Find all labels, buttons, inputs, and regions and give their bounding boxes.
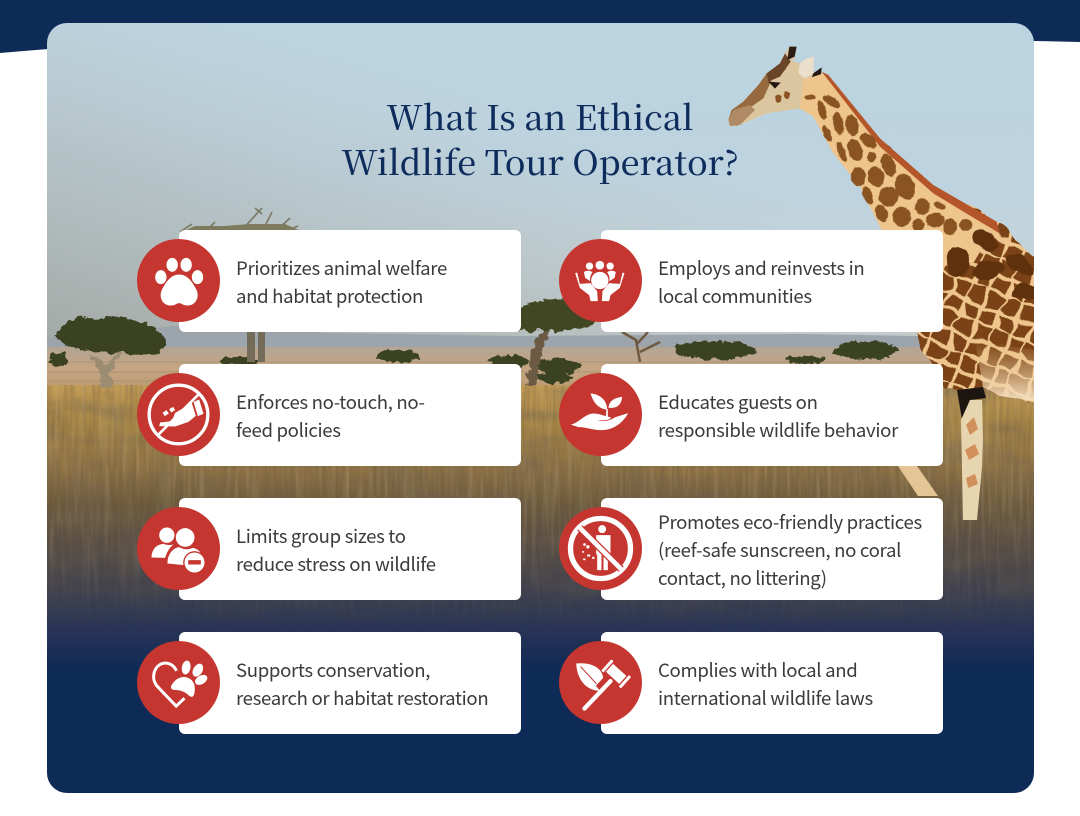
text bbox=[236, 254, 447, 309]
icon: leaf and gavel bbox=[559, 641, 642, 724]
card background bbox=[601, 632, 943, 734]
card background bbox=[179, 498, 521, 600]
text: research or habitat restoration bbox=[236, 684, 488, 711]
text: international wildlife laws bbox=[658, 684, 873, 711]
plain bbox=[47, 347, 932, 385]
text bbox=[658, 656, 873, 711]
distant hills bbox=[47, 326, 920, 347]
mane bbox=[822, 72, 1000, 233]
icon: heart with paw bbox=[137, 641, 220, 724]
belly shade bbox=[975, 340, 1034, 401]
neck spots bbox=[775, 91, 972, 235]
text: Limits group sizes to bbox=[236, 522, 406, 549]
icon: group minus bbox=[137, 507, 220, 590]
text: Complies with local and bbox=[658, 656, 857, 683]
navy wave bbox=[0, 0, 1080, 53]
text: Promotes eco-friendly practices bbox=[658, 508, 922, 535]
icon: no littering bbox=[559, 507, 642, 590]
text: contact, no littering) bbox=[658, 564, 827, 591]
panel: animal welfare bbox=[137, 230, 521, 332]
text: Educates guests on bbox=[658, 388, 818, 415]
card background bbox=[179, 632, 521, 734]
title: Wildlife Tour Operator? bbox=[341, 136, 739, 185]
text bbox=[658, 508, 922, 591]
text: Enforces no-touch, no- bbox=[236, 388, 425, 415]
panel: no touch bbox=[137, 364, 521, 466]
rump dark spots bbox=[947, 226, 1039, 300]
card background bbox=[601, 498, 943, 600]
card background bbox=[601, 364, 943, 466]
bare crown of tree behind first card bbox=[180, 208, 298, 232]
text bbox=[236, 656, 488, 711]
panel: local communities bbox=[559, 230, 943, 332]
text: reduce stress on wildlife bbox=[236, 550, 436, 577]
grass bbox=[47, 385, 1034, 670]
card background bbox=[601, 230, 943, 332]
rear legs bbox=[957, 387, 986, 420]
neck base colour over pattern bbox=[800, 73, 997, 270]
icon: paw bbox=[137, 239, 220, 322]
panel: eco-friendly bbox=[559, 498, 943, 600]
sky bbox=[47, 23, 1034, 343]
panel: group sizes bbox=[137, 498, 521, 600]
text bbox=[236, 522, 436, 577]
panel: conservation bbox=[137, 632, 521, 734]
title bbox=[341, 91, 739, 185]
giraffe bbox=[728, 47, 1044, 520]
text: Prioritizes animal welfare bbox=[236, 254, 447, 281]
text: feed policies bbox=[236, 416, 341, 443]
title: What Is an Ethical bbox=[386, 91, 694, 140]
head bbox=[728, 47, 822, 126]
text: local communities bbox=[658, 282, 812, 309]
panel: education bbox=[559, 364, 943, 466]
card background bbox=[179, 364, 521, 466]
icon: people in hands bbox=[559, 239, 642, 322]
text: responsible wildlife behavior bbox=[658, 416, 898, 443]
panel: laws bbox=[559, 632, 943, 734]
text bbox=[658, 388, 898, 443]
text: (reef-safe sunscreen, no coral bbox=[658, 536, 901, 563]
text bbox=[236, 388, 425, 443]
card background bbox=[179, 230, 521, 332]
text: Supports conservation, bbox=[236, 656, 430, 683]
text bbox=[658, 254, 864, 309]
acacia trees bbox=[49, 299, 898, 388]
text: and habitat protection bbox=[236, 282, 423, 309]
icon: no-touch hand bbox=[137, 373, 220, 456]
text: Employs and reinvests in bbox=[658, 254, 864, 281]
icon: plant on hand bbox=[559, 373, 642, 456]
